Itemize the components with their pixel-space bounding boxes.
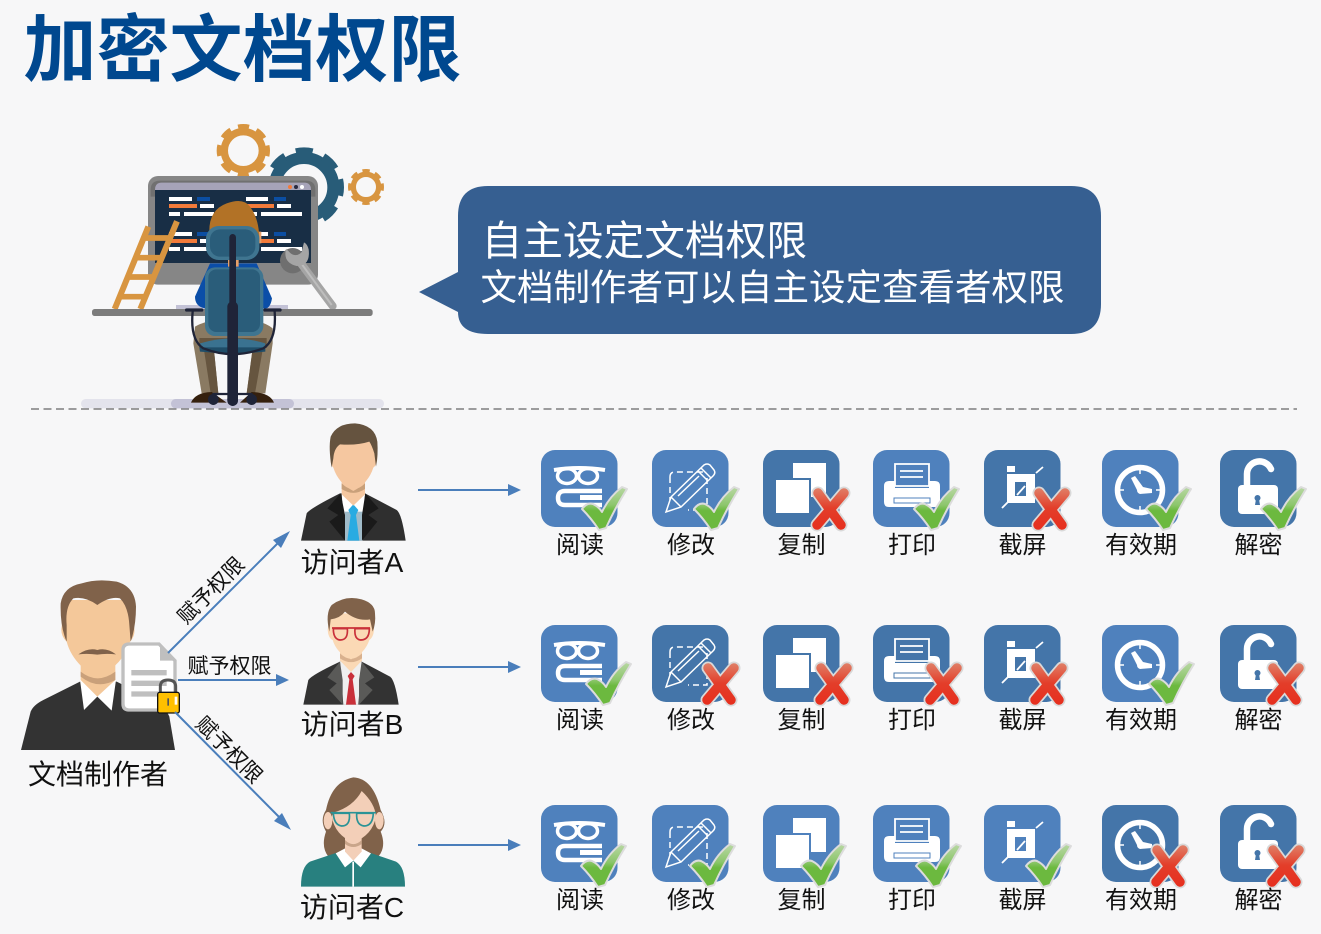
row B permission: read allowed (541, 625, 631, 734)
speech bubble (419, 186, 1101, 334)
dashed divider (31, 408, 1297, 410)
row A permission: print allowed: 打印 (888, 532, 936, 559)
monitor (148, 176, 318, 285)
row C permission: read allowed (541, 805, 626, 914)
label: grant permission middle: 赋予权限 (188, 655, 272, 678)
row A permission: validity allowed (1102, 450, 1191, 559)
row A permission: screenshot denied (984, 450, 1065, 559)
row C permission: read allowed: 阅读 (556, 887, 604, 914)
person: visitor A (301, 423, 406, 541)
row B permission: decrypt denied (1220, 625, 1299, 734)
icon: large orange gear (220, 127, 267, 174)
row A permission: decrypt allowed: 解密 (1234, 532, 1282, 559)
arrow: visitor B to permissions (418, 661, 521, 673)
row A permission: read allowed (541, 450, 627, 559)
floor shadow (81, 399, 384, 408)
row A permission: decrypt allowed (1220, 450, 1306, 559)
title: 加密文档权限 (24, 10, 462, 91)
row A permission: edit allowed: 修改 (667, 532, 715, 559)
row C permission: decrypt denied (1220, 805, 1299, 914)
arrow: author to visitor B (178, 674, 289, 686)
person: visitor B (303, 598, 399, 705)
person seated on chair (191, 201, 274, 403)
row B permission: print denied: 打印 (888, 707, 936, 734)
row C permission: screenshot allowed: 截屏 (998, 887, 1046, 914)
icon: small orange gear (350, 171, 382, 203)
row B permission: validity allowed: 有效期 (1105, 707, 1177, 734)
row A permission: screenshot denied: 截屏 (998, 532, 1046, 559)
row B permission: edit denied: 修改 (667, 707, 715, 734)
row B permission: edit denied (652, 625, 734, 734)
icon: ladder (115, 221, 177, 309)
row C permission: edit allowed (652, 805, 735, 914)
row B permission: read allowed: 阅读 (556, 707, 604, 734)
row B permission: print denied (873, 625, 957, 734)
icon: wrench (280, 242, 333, 306)
row C permission: screenshot allowed (984, 805, 1071, 914)
row C permission: edit allowed: 修改 (667, 887, 715, 914)
desk (92, 305, 373, 316)
row C permission: copy allowed (763, 805, 846, 914)
row B permission: validity allowed (1102, 625, 1194, 734)
row B permission: copy denied: 复制 (778, 707, 826, 734)
row A permission: edit allowed (652, 450, 739, 559)
person: visitor C (301, 777, 405, 887)
arrow: author to visitor A (168, 531, 290, 653)
row A permission: copy denied: 复制 (778, 532, 826, 559)
visitor C label: 访问者C (300, 892, 404, 923)
row B permission: decrypt denied: 解密 (1234, 707, 1282, 734)
visitor B label: 访问者B (301, 709, 403, 740)
person: document author (21, 580, 179, 750)
arrow: visitor C to permissions (418, 839, 521, 851)
icon: blue gear (268, 151, 340, 223)
row C permission: decrypt denied: 解密 (1234, 887, 1282, 914)
author label: 文档制作者 (28, 759, 168, 790)
arrow: visitor A to permissions (418, 484, 521, 496)
row A permission: print allowed (873, 450, 959, 559)
row B permission: copy denied (763, 625, 847, 734)
row B permission: screenshot denied: 截屏 (998, 707, 1046, 734)
row C permission: print allowed: 打印 (888, 887, 936, 914)
row B permission: screenshot denied (984, 625, 1062, 734)
office chair frame (187, 237, 280, 401)
row C permission: print allowed (873, 805, 961, 914)
arrow: author to visitor C (175, 712, 291, 830)
row A permission: read allowed: 阅读 (556, 532, 604, 559)
icon: locked document (123, 644, 179, 713)
row C permission: validity denied (1102, 805, 1183, 914)
bubble heading: 自主设定文档权限 (482, 218, 807, 264)
row A permission: validity allowed: 有效期 (1105, 532, 1177, 559)
label: grant permission upper: 赋予权限 (174, 553, 249, 629)
illustration: developer at computer desk (81, 127, 384, 408)
visitor A label: 访问者A (301, 547, 404, 578)
row A permission: copy denied (763, 450, 844, 559)
bubble description: 文档制作者可以自主设定查看者权限 (480, 267, 1064, 308)
label: grant permission lower: 赋予权限 (191, 713, 266, 788)
row C permission: copy allowed: 复制 (778, 887, 826, 914)
row C permission: validity denied: 有效期 (1105, 887, 1177, 914)
